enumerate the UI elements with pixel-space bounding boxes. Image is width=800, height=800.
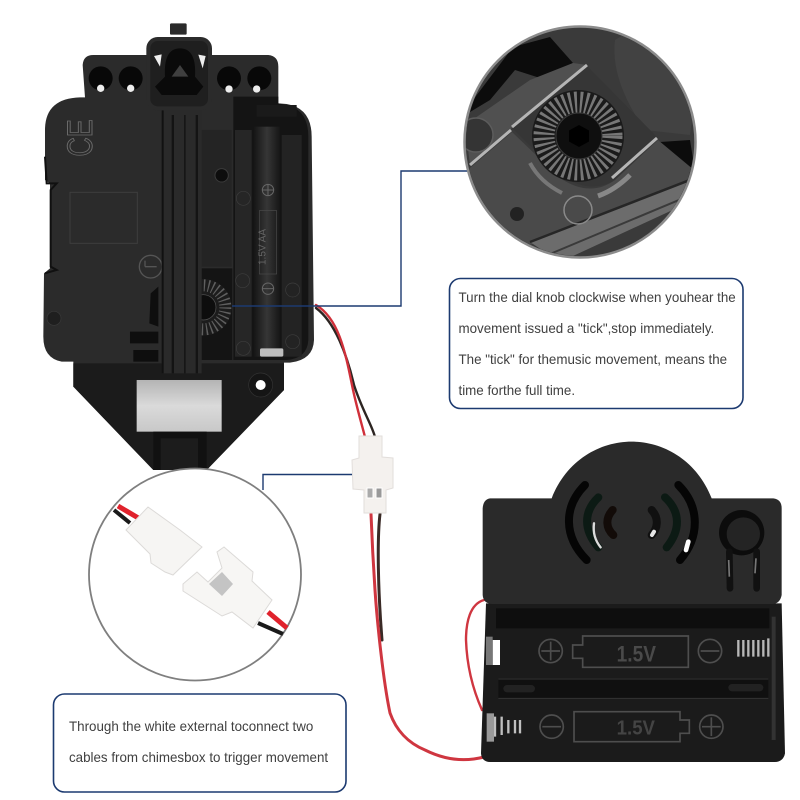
bevel gear knob	[532, 90, 624, 182]
tray dividers	[496, 608, 769, 698]
screw	[215, 169, 228, 182]
CE mark: CE	[61, 119, 100, 157]
pendulum frame	[148, 23, 210, 108]
white weight pad	[137, 380, 222, 432]
label rectangle	[70, 192, 137, 243]
body rivet	[47, 311, 61, 325]
battery compartment	[233, 97, 308, 360]
inline connector	[352, 436, 393, 513]
text box: dial instructions: Turn the dial knob clockwise when youhear the	[458, 290, 736, 305]
lower battery markings	[540, 712, 723, 742]
speaker slots	[569, 485, 695, 560]
pocket floor	[636, 116, 650, 130]
wire from movement to connector	[316, 305, 375, 437]
text box: cable instructions: cables from chimesbox to trigger movement	[69, 750, 328, 765]
pendulum stem	[153, 432, 207, 470]
mounting eyelet	[249, 373, 273, 397]
wires bottom right	[258, 612, 287, 634]
battery housing segment	[614, 25, 700, 135]
battery springs and contacts	[486, 617, 776, 742]
wires top left	[114, 506, 140, 523]
buzzer	[719, 510, 764, 588]
upper battery markings	[539, 636, 722, 667]
battery tray	[481, 603, 785, 762]
text box: cable instructions	[54, 694, 346, 792]
slot	[149, 287, 158, 327]
right side plate	[202, 130, 232, 267]
text box: dial instructions: movement issued a "tick",stop immediately.	[458, 321, 714, 336]
central pendulum rail	[162, 110, 202, 373]
speaker housing	[483, 442, 782, 604]
upper dark region	[465, 37, 573, 115]
text box: dial instructions	[450, 278, 743, 408]
connector socket	[183, 547, 272, 628]
dial knob	[175, 268, 232, 360]
metal contacts	[209, 572, 233, 596]
lower plate	[460, 132, 700, 245]
connector plug	[126, 507, 202, 575]
left edge clip	[45, 157, 57, 273]
leader line: dial knob	[232, 171, 469, 306]
text box: dial instructions: time forthe full time.	[458, 383, 575, 398]
lit edges	[470, 65, 587, 165]
lower battery label: 1.5V	[617, 717, 655, 740]
lower plate	[73, 363, 284, 470]
rivet	[510, 207, 524, 221]
battery compartment: 1.5V AA	[257, 229, 268, 265]
wire from connector to chime box	[371, 514, 484, 760]
lower bar	[532, 182, 687, 256]
time symbol	[139, 255, 162, 278]
chime box	[481, 442, 785, 762]
mounting holes	[89, 66, 271, 93]
left round boss	[466, 117, 494, 152]
text box: cable instructions: Through the white external toconnect two	[69, 719, 313, 734]
grey band above edge	[465, 63, 587, 165]
movement body	[43, 55, 314, 470]
zoom circle: connector	[89, 468, 301, 680]
leader line: connector	[263, 474, 352, 490]
rotation arrows	[530, 163, 562, 193]
zoom circle: dial knob	[459, 25, 705, 262]
upper battery label: 1.5V	[617, 641, 656, 666]
clock movement	[43, 23, 314, 470]
text box: dial instructions: The "tick" for themusic movement, means the	[458, 352, 727, 367]
